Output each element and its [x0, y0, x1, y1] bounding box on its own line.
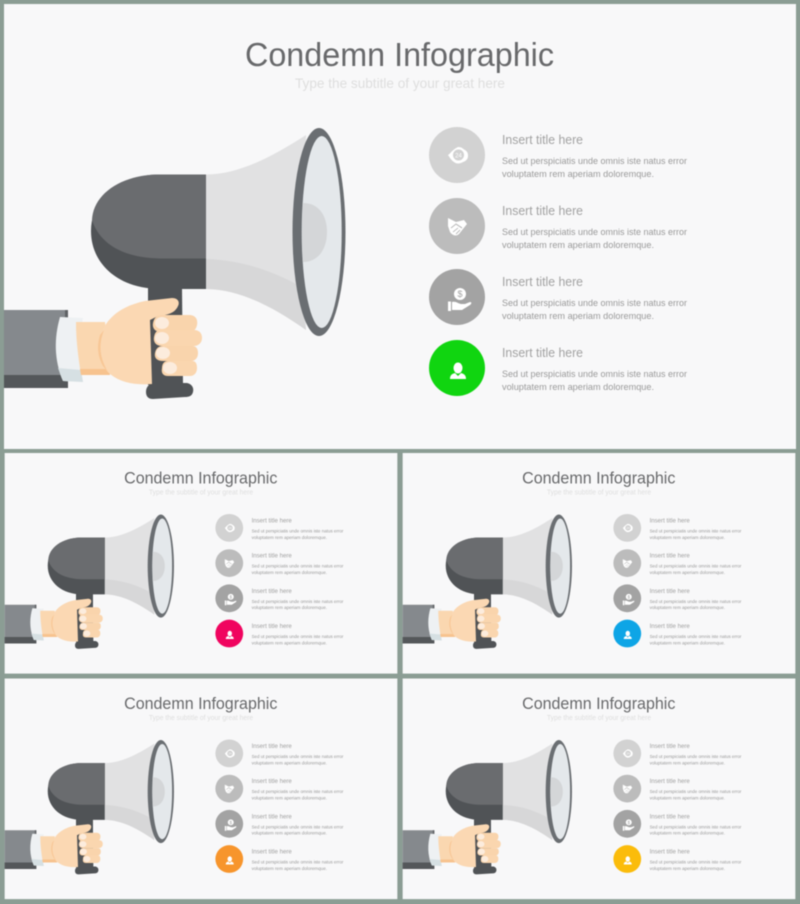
panel: blue variant: Sed ut perspiciatis unde omnis iste natus error [650, 564, 742, 569]
item 3: hand with dollar coin [429, 269, 687, 325]
panel: pink variant: voluptatem rem aperiam doloremque. [252, 640, 327, 645]
panel: orange variant: voluptatem rem aperiam doloremque. [252, 831, 327, 836]
panel: yellow variant: Sed ut perspiciatis unde omnis iste natus error [650, 789, 742, 794]
panel: blue variant: Insert title here [650, 517, 690, 524]
panel: yellow variant: voluptatem rem aperiam doloremque. [650, 831, 725, 836]
item 2: handshake [429, 198, 687, 254]
panel: pink variant: voluptatem rem aperiam doloremque. [252, 535, 327, 540]
item 3: hand with dollar coin: voluptatem rem aperiam doloremque. [502, 311, 654, 321]
panel: blue variant: Insert title here [650, 553, 690, 560]
panel: pink variant: Condemn Infographic [124, 470, 277, 488]
title: Condemn Infographic [245, 36, 554, 73]
panel: yellow variant: Sed ut perspiciatis unde omnis iste natus error [650, 754, 742, 759]
panel: blue variant: voluptatem rem aperiam doloremque. [650, 535, 725, 540]
panel: orange variant: Sed ut perspiciatis unde omnis iste natus error [252, 789, 344, 794]
panel: blue variant: 24 [626, 526, 630, 530]
panel: yellow variant: voluptatem rem aperiam doloremque. [650, 760, 725, 765]
panel: pink variant: Sed ut perspiciatis unde omnis iste natus error [252, 634, 344, 639]
panel: blue variant: voluptatem rem aperiam doloremque. [650, 605, 725, 610]
panel: blue variant: $ [628, 594, 631, 599]
panel: orange variant: Sed ut perspiciatis unde omnis iste natus error [252, 754, 344, 759]
panel: blue variant: Sed ut perspiciatis unde omnis iste natus error [650, 599, 742, 604]
panel: pink variant: Insert title here [252, 517, 292, 524]
panel: pink variant: Insert title here [252, 623, 292, 630]
item 2: handshake: Insert title here [502, 204, 583, 218]
panel: blue variant: Insert title here [650, 623, 690, 630]
item 3: hand with dollar coin: $ [457, 289, 463, 299]
panel: yellow variant: Condemn Infographic [522, 695, 675, 713]
panel: pink variant: 24 [228, 526, 232, 530]
panel: yellow variant: Type the subtitle of your great here [547, 715, 651, 722]
panel: orange variant: Insert title here [252, 778, 292, 785]
panel: orange variant: Sed ut perspiciatis unde omnis iste natus error [252, 824, 344, 829]
panel: yellow variant: voluptatem rem aperiam doloremque. [650, 796, 725, 801]
item 1: 24 hour service [429, 127, 687, 183]
panel: blue variant: Sed ut perspiciatis unde omnis iste natus error [650, 528, 742, 533]
panel: blue variant: Condemn Infographic [522, 470, 675, 488]
item 2: handshake: Sed ut perspiciatis unde omnis iste natus error [502, 227, 687, 237]
panel: yellow variant: Insert title here [650, 849, 690, 856]
illustration: hand holding megaphone [4, 128, 346, 399]
panel: pink variant: Insert title here [252, 588, 292, 595]
panel: yellow variant [403, 678, 795, 899]
panel: orange variant: Insert title here [252, 813, 292, 820]
item 4: person, green accent [429, 340, 687, 396]
subtitle: Type the subtitle of your great here [295, 75, 505, 91]
panel: pink variant: voluptatem rem aperiam doloremque. [252, 570, 327, 575]
item 2: handshake: voluptatem rem aperiam doloremque. [502, 240, 654, 250]
item 3: hand with dollar coin: Insert title here [502, 275, 583, 289]
panel: yellow variant: Insert title here [650, 813, 690, 820]
panel: pink variant: voluptatem rem aperiam doloremque. [252, 605, 327, 610]
item 1: 24 hour service: Insert title here [502, 133, 583, 147]
item 4: person, green accent: Insert title here [502, 346, 583, 360]
panel: pink variant: Type the subtitle of your great here [149, 490, 253, 497]
item 1: 24 hour service: voluptatem rem aperiam doloremque. [502, 169, 654, 179]
panel: orange variant: 24 [228, 752, 232, 756]
panel: pink variant: Sed ut perspiciatis unde omnis iste natus error [252, 528, 344, 533]
panel: pink variant: Sed ut perspiciatis unde omnis iste natus error [252, 599, 344, 604]
panel: blue variant: voluptatem rem aperiam doloremque. [650, 570, 725, 575]
panel: yellow variant: Insert title here [650, 743, 690, 750]
panel: yellow variant: voluptatem rem aperiam doloremque. [650, 866, 725, 871]
panel: orange variant: voluptatem rem aperiam doloremque. [252, 866, 327, 871]
panel: orange variant: voluptatem rem aperiam doloremque. [252, 796, 327, 801]
panel: pink variant: $ [230, 594, 233, 599]
panel: blue variant [403, 453, 795, 674]
panel: yellow variant: Sed ut perspiciatis unde omnis iste natus error [650, 824, 742, 829]
item 4: person, green accent: voluptatem rem aperiam doloremque. [502, 382, 654, 392]
panel: orange variant: Insert title here [252, 743, 292, 750]
item 3: hand with dollar coin: Sed ut perspiciatis unde omnis iste natus error [502, 298, 687, 308]
panel: orange variant: $ [230, 820, 233, 825]
panel: orange variant: Type the subtitle of your great here [149, 715, 253, 722]
panel: yellow variant: 24 [626, 752, 630, 756]
panel: yellow variant: Sed ut perspiciatis unde omnis iste natus error [650, 859, 742, 864]
panel: blue variant: Sed ut perspiciatis unde omnis iste natus error [650, 634, 742, 639]
panel: orange variant: Condemn Infographic [124, 695, 277, 713]
panel: yellow variant: Insert title here [650, 778, 690, 785]
panel: orange variant: voluptatem rem aperiam doloremque. [252, 760, 327, 765]
panel: blue variant: voluptatem rem aperiam doloremque. [650, 640, 725, 645]
panel: orange variant: Insert title here [252, 849, 292, 856]
panel: pink variant: Insert title here [252, 553, 292, 560]
panel: pink variant [5, 453, 397, 674]
panel: blue variant: Type the subtitle of your great here [547, 490, 651, 497]
panel: main slide [4, 4, 796, 449]
item 1: 24 hour service: Sed ut perspiciatis unde omnis iste natus error [502, 156, 687, 166]
panel: orange variant: Sed ut perspiciatis unde omnis iste natus error [252, 859, 344, 864]
panel: pink variant: Sed ut perspiciatis unde omnis iste natus error [252, 564, 344, 569]
panel: blue variant: Insert title here [650, 588, 690, 595]
panel: orange variant [5, 678, 397, 899]
panel: yellow variant: $ [628, 820, 631, 825]
item 4: person, green accent: Sed ut perspiciatis unde omnis iste natus error [502, 369, 687, 379]
item 1: 24 hour service: 24 [455, 154, 462, 160]
